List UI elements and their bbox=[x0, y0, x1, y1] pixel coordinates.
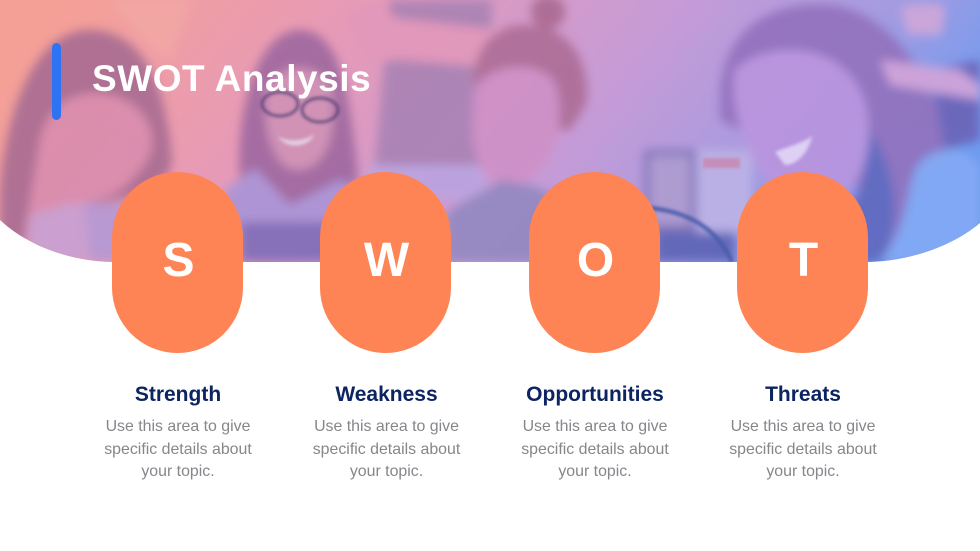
pill: W: W bbox=[364, 234, 409, 287]
title: SWOT Analysis bbox=[92, 58, 371, 99]
objects on the desk bbox=[644, 150, 696, 232]
heading: Strength: Strength bbox=[135, 383, 221, 406]
text: Threats details: Use this area to give bbox=[731, 418, 875, 435]
accent bar bbox=[52, 43, 61, 120]
text: Strength details: Use this area to give bbox=[106, 418, 250, 435]
header photo with gradient overlay bbox=[0, 0, 980, 262]
third woman bbox=[474, 25, 587, 130]
text: Weakness details: Use this area to give bbox=[314, 418, 459, 435]
standing person bbox=[374, 0, 492, 175]
text: Weakness details bbox=[313, 418, 460, 480]
upper left arm bbox=[126, 5, 181, 50]
text: Threats details: your topic. bbox=[766, 463, 840, 480]
text: Threats details: specific details about bbox=[729, 441, 877, 458]
text: Opportunities details: specific details about bbox=[521, 441, 669, 458]
text: Weakness details: your topic. bbox=[350, 463, 423, 480]
pill: W bbox=[320, 172, 451, 353]
heading: Opportunities: Opportunities bbox=[526, 383, 664, 406]
second woman bbox=[239, 30, 358, 215]
text: Strength details: specific details about bbox=[104, 441, 252, 458]
heading: Threats: Threats bbox=[765, 383, 841, 406]
pill: T bbox=[737, 172, 868, 353]
pill: S: S bbox=[162, 234, 194, 287]
text: Strength details: your topic. bbox=[141, 463, 215, 480]
pill: O bbox=[529, 172, 660, 353]
text: Weakness details: specific details about bbox=[313, 441, 460, 458]
pill: O: O bbox=[577, 234, 614, 287]
text: Opportunities details: your topic. bbox=[558, 463, 632, 480]
fourth woman bbox=[720, 4, 949, 262]
pill: T: T bbox=[789, 234, 818, 287]
text: Threats details bbox=[729, 418, 877, 480]
text: Opportunities details bbox=[521, 418, 669, 480]
heading: Weakness: Weakness bbox=[335, 383, 438, 406]
text: Strength details bbox=[104, 418, 252, 480]
pill: S bbox=[112, 172, 243, 353]
text: Opportunities details: Use this area to give bbox=[523, 418, 667, 435]
left woman bbox=[0, 30, 172, 262]
